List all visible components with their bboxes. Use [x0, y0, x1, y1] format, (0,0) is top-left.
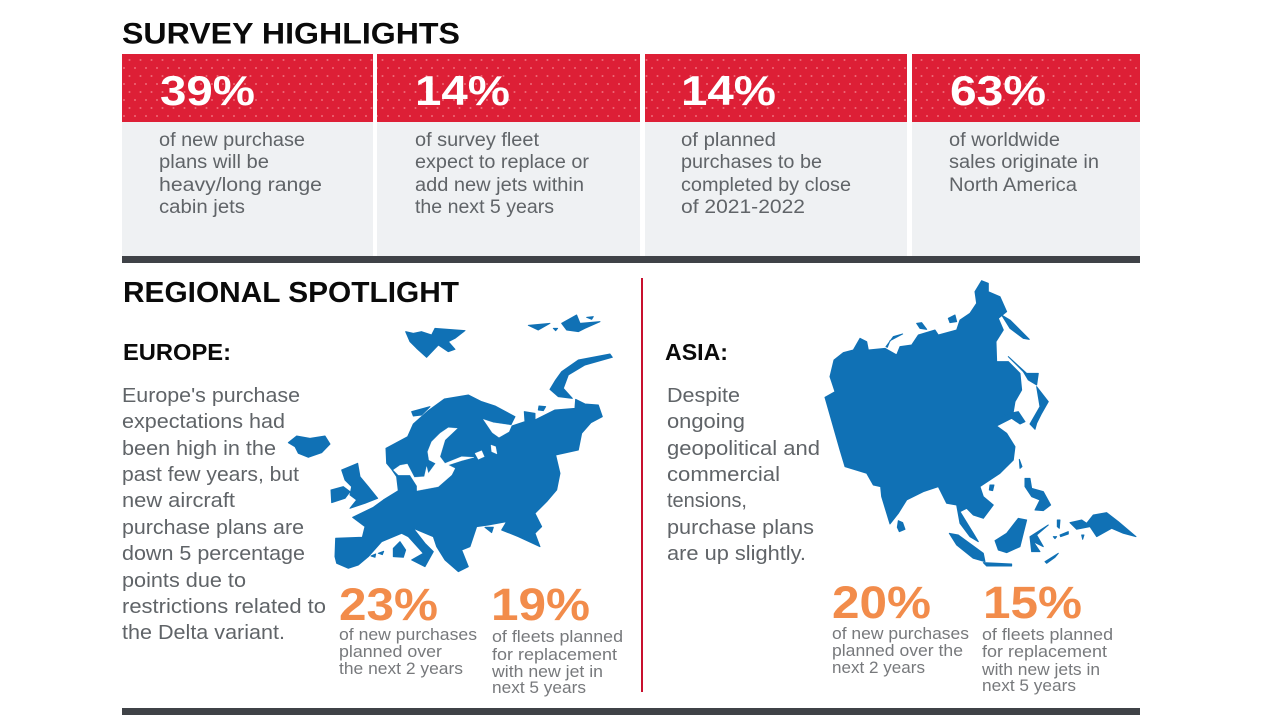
text: asia paragraph: purchase plans — [667, 516, 814, 539]
panel: stat 63%: 63% — [950, 67, 1046, 114]
text: asia paragraph: ongoing — [667, 410, 745, 433]
heading: asia: ASIA: — [665, 339, 728, 365]
heading: europe: EUROPE: — [123, 339, 231, 365]
text: europe paragraph — [122, 384, 326, 644]
map detail: baltic sea — [393, 428, 474, 491]
stat: asia 15%: with new jets in — [981, 661, 1100, 679]
stat: asia 15%: 15% — [983, 577, 1082, 628]
panel: stat 63% — [912, 54, 1140, 256]
stat: asia 20%: 20% — [832, 577, 931, 628]
stat: europe 23%: of new purchases — [339, 626, 477, 644]
panel: stat 39%: heavy/long range — [159, 175, 322, 196]
stat: asia 15%: of fleets planned — [982, 626, 1113, 644]
panel: stat 14% fleet: expect to replace or — [415, 152, 590, 173]
heading: regional spotlight: REGIONAL SPOTLIGHT — [123, 277, 459, 309]
text: europe paragraph: points due to — [122, 569, 246, 592]
panel: stat 63%: North America — [949, 175, 1077, 196]
panel: stat 39%: 39% — [160, 67, 255, 114]
text: asia paragraph — [667, 384, 820, 565]
panel: stat 14% fleet: of survey fleet — [415, 130, 540, 151]
panel: stat 63%: sales originate in — [949, 152, 1099, 173]
text: europe paragraph: purchase plans are — [122, 516, 304, 539]
panel: stat 39%: of new purchase — [159, 130, 305, 151]
stat: asia 15%: next 5 years — [982, 677, 1076, 695]
panel: stat 14% fleet: 14% — [415, 67, 510, 114]
title: survey highlights: SURVEY HIGHLIGHTS — [122, 18, 460, 50]
map detail: white sea — [475, 419, 512, 459]
panel: stat 14% purchases: completed by close — [681, 175, 851, 196]
stat: europe 19%: 19% — [491, 579, 590, 630]
map: europe — [288, 315, 612, 572]
panel: stat 14% purchases: of planned — [681, 130, 776, 151]
text: europe paragraph: new aircraft — [122, 489, 235, 512]
stat: asia 20% — [832, 577, 969, 677]
text: asia paragraph: tensions, — [667, 489, 747, 512]
stat: europe 23%: planned over — [339, 643, 443, 661]
stat: europe 23% — [339, 579, 477, 678]
panel: stat 14% purchases: of 2021-2022 — [681, 197, 805, 218]
stat: europe 19% — [491, 579, 623, 697]
stat: asia 20%: of new purchases — [832, 625, 969, 643]
text: asia paragraph: geopolitical and — [667, 437, 820, 460]
panel: stat 63%: of worldwide — [949, 130, 1060, 151]
stat: europe 19%: next 5 years — [492, 679, 586, 697]
panel: stat 39%: cabin jets — [159, 197, 245, 218]
stat: europe 23%: the next 2 years — [339, 660, 463, 678]
panel: stat 14% purchases: purchases to be — [681, 152, 822, 173]
text: europe paragraph: the Delta variant. — [122, 621, 285, 644]
panel: stat 14% fleet: the next 5 years — [415, 197, 554, 218]
text: asia paragraph: Despite — [667, 384, 740, 407]
panel: stat 39% — [122, 54, 373, 256]
stat: europe 19%: with new jet in — [491, 663, 603, 681]
text: europe paragraph: down 5 percentage — [122, 542, 305, 565]
text: europe paragraph: expectations had — [122, 410, 285, 433]
text: europe paragraph: Europe's purchase — [122, 384, 300, 407]
text: europe paragraph: been high in the — [122, 437, 276, 460]
stat: asia 15% — [981, 577, 1113, 695]
text: asia paragraph: commercial — [667, 463, 780, 486]
panel: stat 14% fleet — [377, 54, 640, 256]
panel: stat 14% purchases — [645, 54, 907, 256]
panel: stat 14% fleet: add new jets within — [415, 175, 584, 196]
stat: europe 19%: for replacement — [492, 646, 617, 664]
text: asia paragraph: are up slightly. — [667, 542, 806, 565]
stat: asia 20%: next 2 years — [832, 659, 925, 677]
panel: stat 14% purchases: 14% — [681, 67, 776, 114]
stat: europe 19%: of fleets planned — [492, 628, 623, 646]
stat: asia 20%: planned over the — [832, 642, 963, 660]
text: europe paragraph: past few years, but — [122, 463, 299, 486]
stat: asia 15%: for replacement — [982, 643, 1107, 661]
stat: europe 23%: 23% — [339, 579, 438, 630]
text: europe paragraph: restrictions related to — [122, 595, 326, 618]
panel: stat 39%: plans will be — [159, 152, 269, 173]
map: asia — [825, 281, 1136, 566]
